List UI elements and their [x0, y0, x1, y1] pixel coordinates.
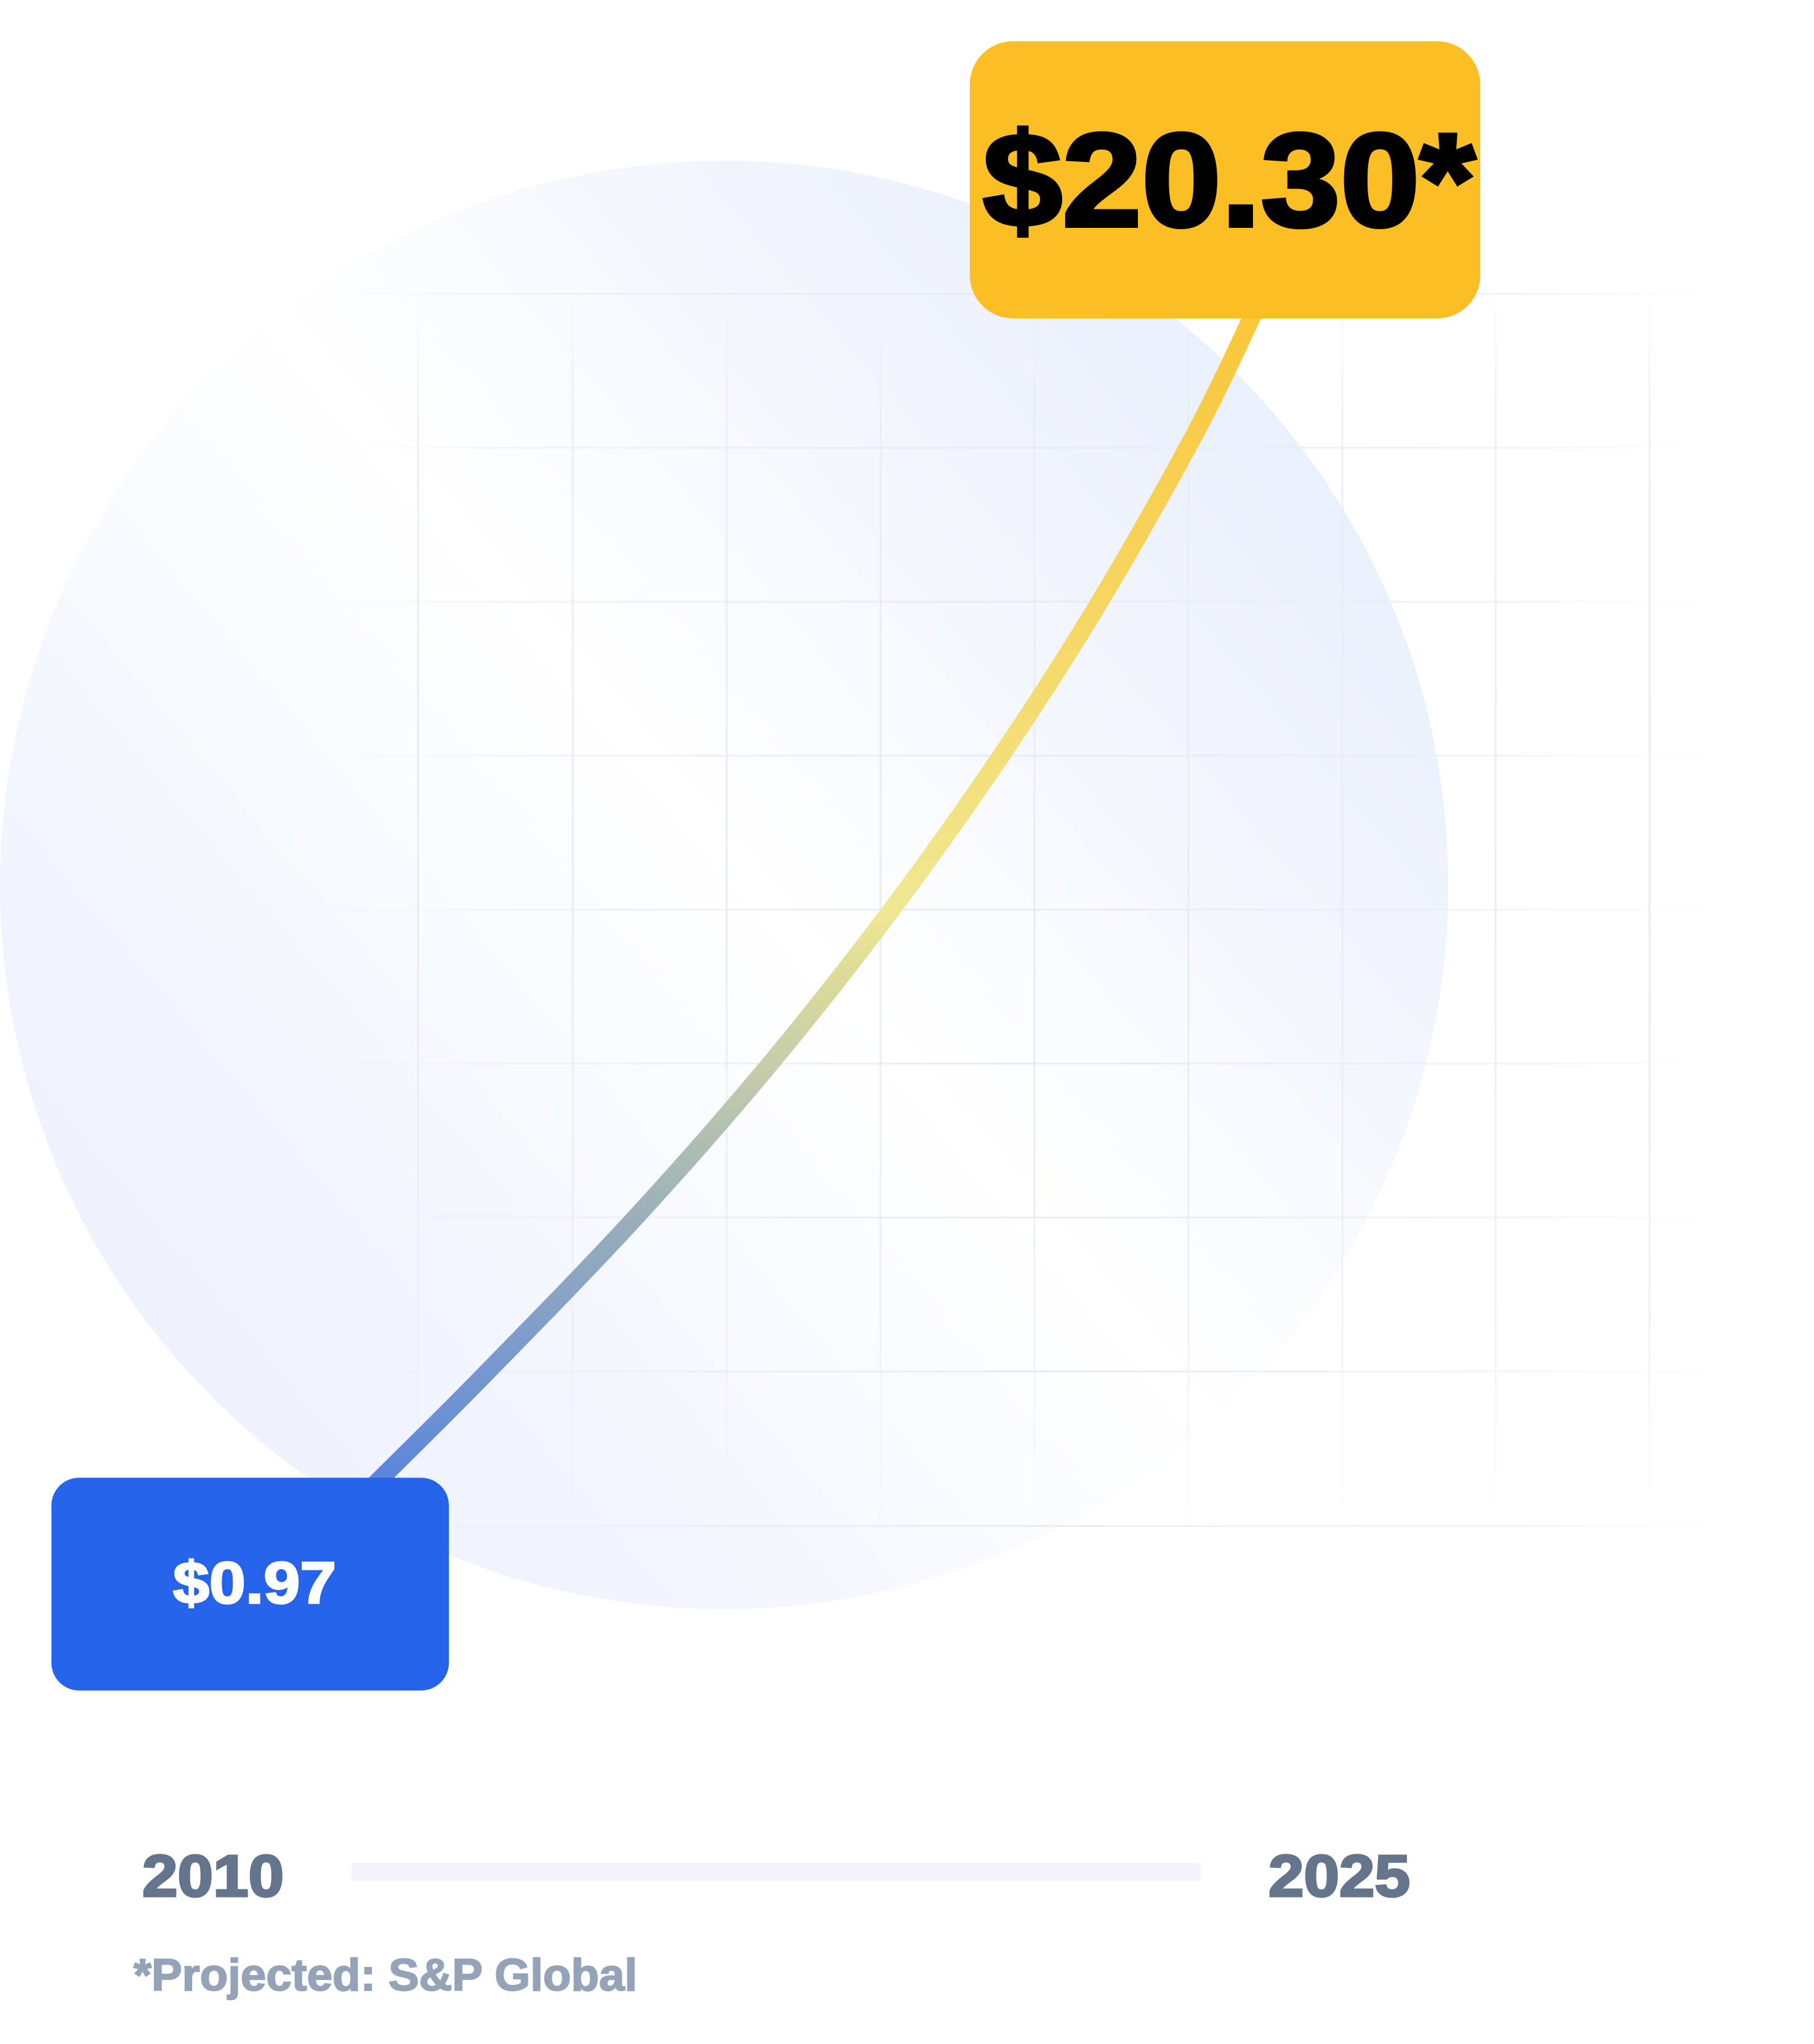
callout: 2025 projected value — [970, 41, 1480, 318]
axis bar — [352, 1863, 1201, 1881]
growth curve from 2010 to 2025 — [360, 308, 1256, 1499]
callout: 2010 value: $0.97 — [173, 1550, 336, 1616]
background circle — [0, 161, 1448, 1609]
callout: 2025 projected value: $20.30* — [983, 105, 1475, 254]
axis label: 2010: 2010 — [142, 1843, 284, 1909]
axis label: 2025: 2025 — [1268, 1843, 1410, 1909]
footnote: *Projected: S&P Global — [134, 1950, 637, 2000]
callout: 2010 value — [52, 1478, 449, 1691]
